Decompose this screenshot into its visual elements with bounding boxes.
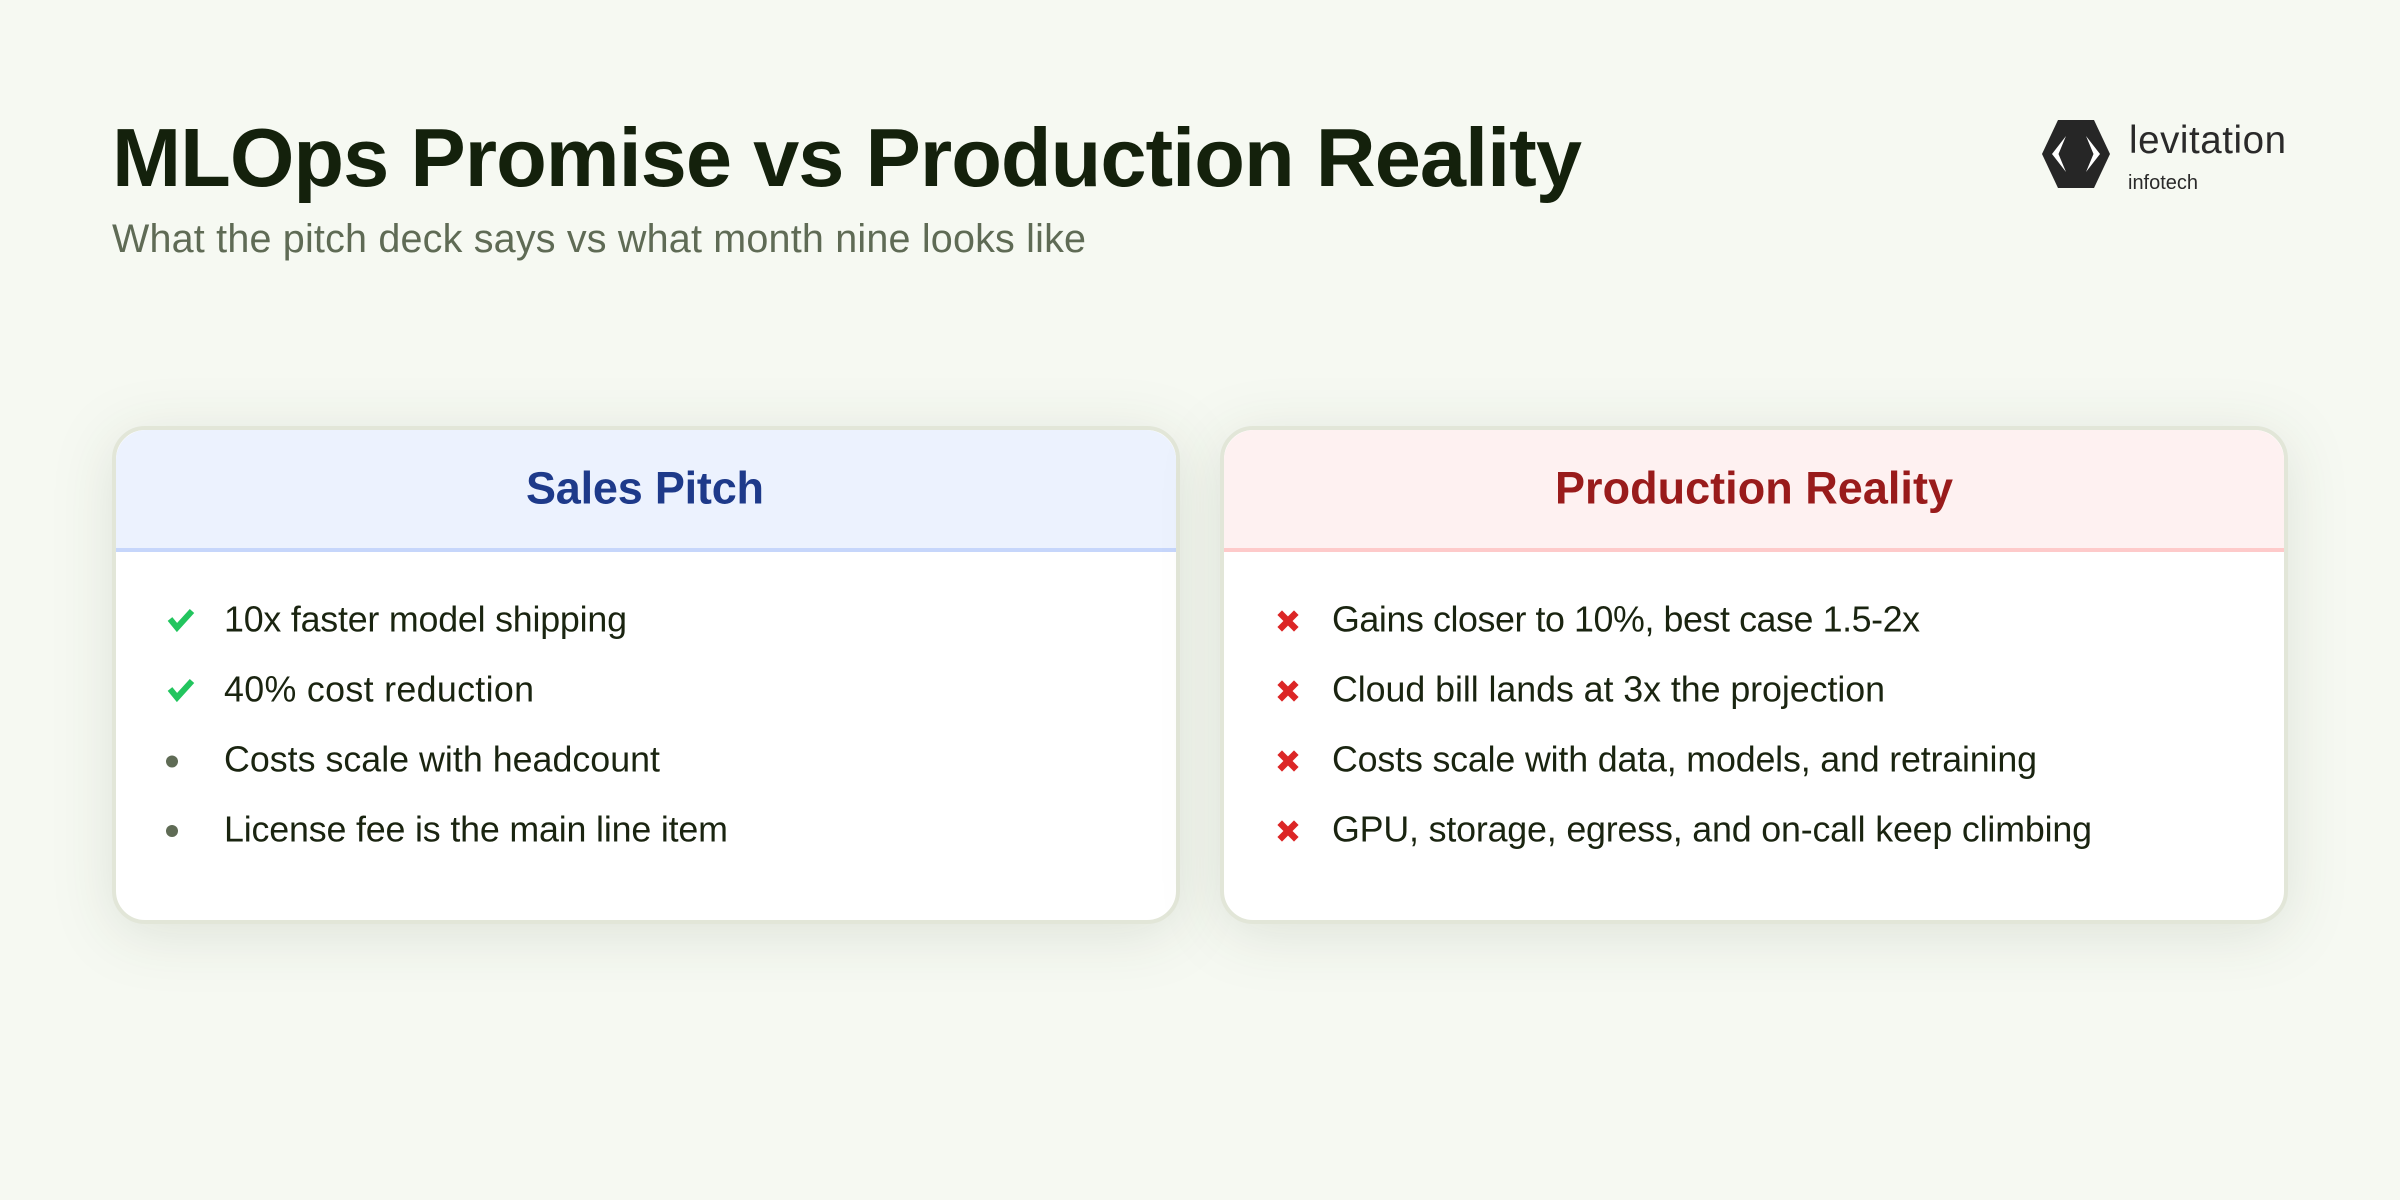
header band	[116, 430, 1176, 548]
card background	[114, 428, 1178, 922]
item: costs scale headcount: Costs scale with headcount	[224, 740, 660, 780]
panel heading: Sales Pitch	[526, 462, 764, 514]
item: gains: Gains closer to 10%, best case 1.5-2x	[1332, 600, 1920, 640]
header band	[1224, 430, 2284, 548]
item: costs scale data: Costs scale with data, models, and retraining	[1332, 740, 2037, 780]
panel heading: Production Reality	[1555, 462, 1953, 514]
logo: levitation infotech	[2042, 119, 2286, 194]
subtitle: What the pitch deck says vs what month nine looks like	[112, 217, 1086, 261]
panel: production reality	[1222, 428, 2286, 922]
logo wordmark: levitation	[2129, 119, 2286, 162]
item: 10x faster: 10x faster model shipping	[224, 600, 627, 640]
item: cloud bill: Cloud bill lands at 3x the projection	[1332, 670, 1885, 710]
panel: sales pitch	[114, 428, 1178, 922]
title: MLOps Promise vs Production Reality	[112, 111, 1582, 204]
logo subtext: infotech	[2128, 172, 2198, 194]
card background	[1222, 428, 2286, 922]
item: gpu storage: GPU, storage, egress, and on-call keep climbing	[1332, 810, 2092, 850]
item: 40% cost: 40% cost reduction	[224, 670, 534, 710]
icon: hexagon logo mark	[2042, 120, 2110, 188]
item: license fee: License fee is the main line item	[224, 810, 728, 850]
